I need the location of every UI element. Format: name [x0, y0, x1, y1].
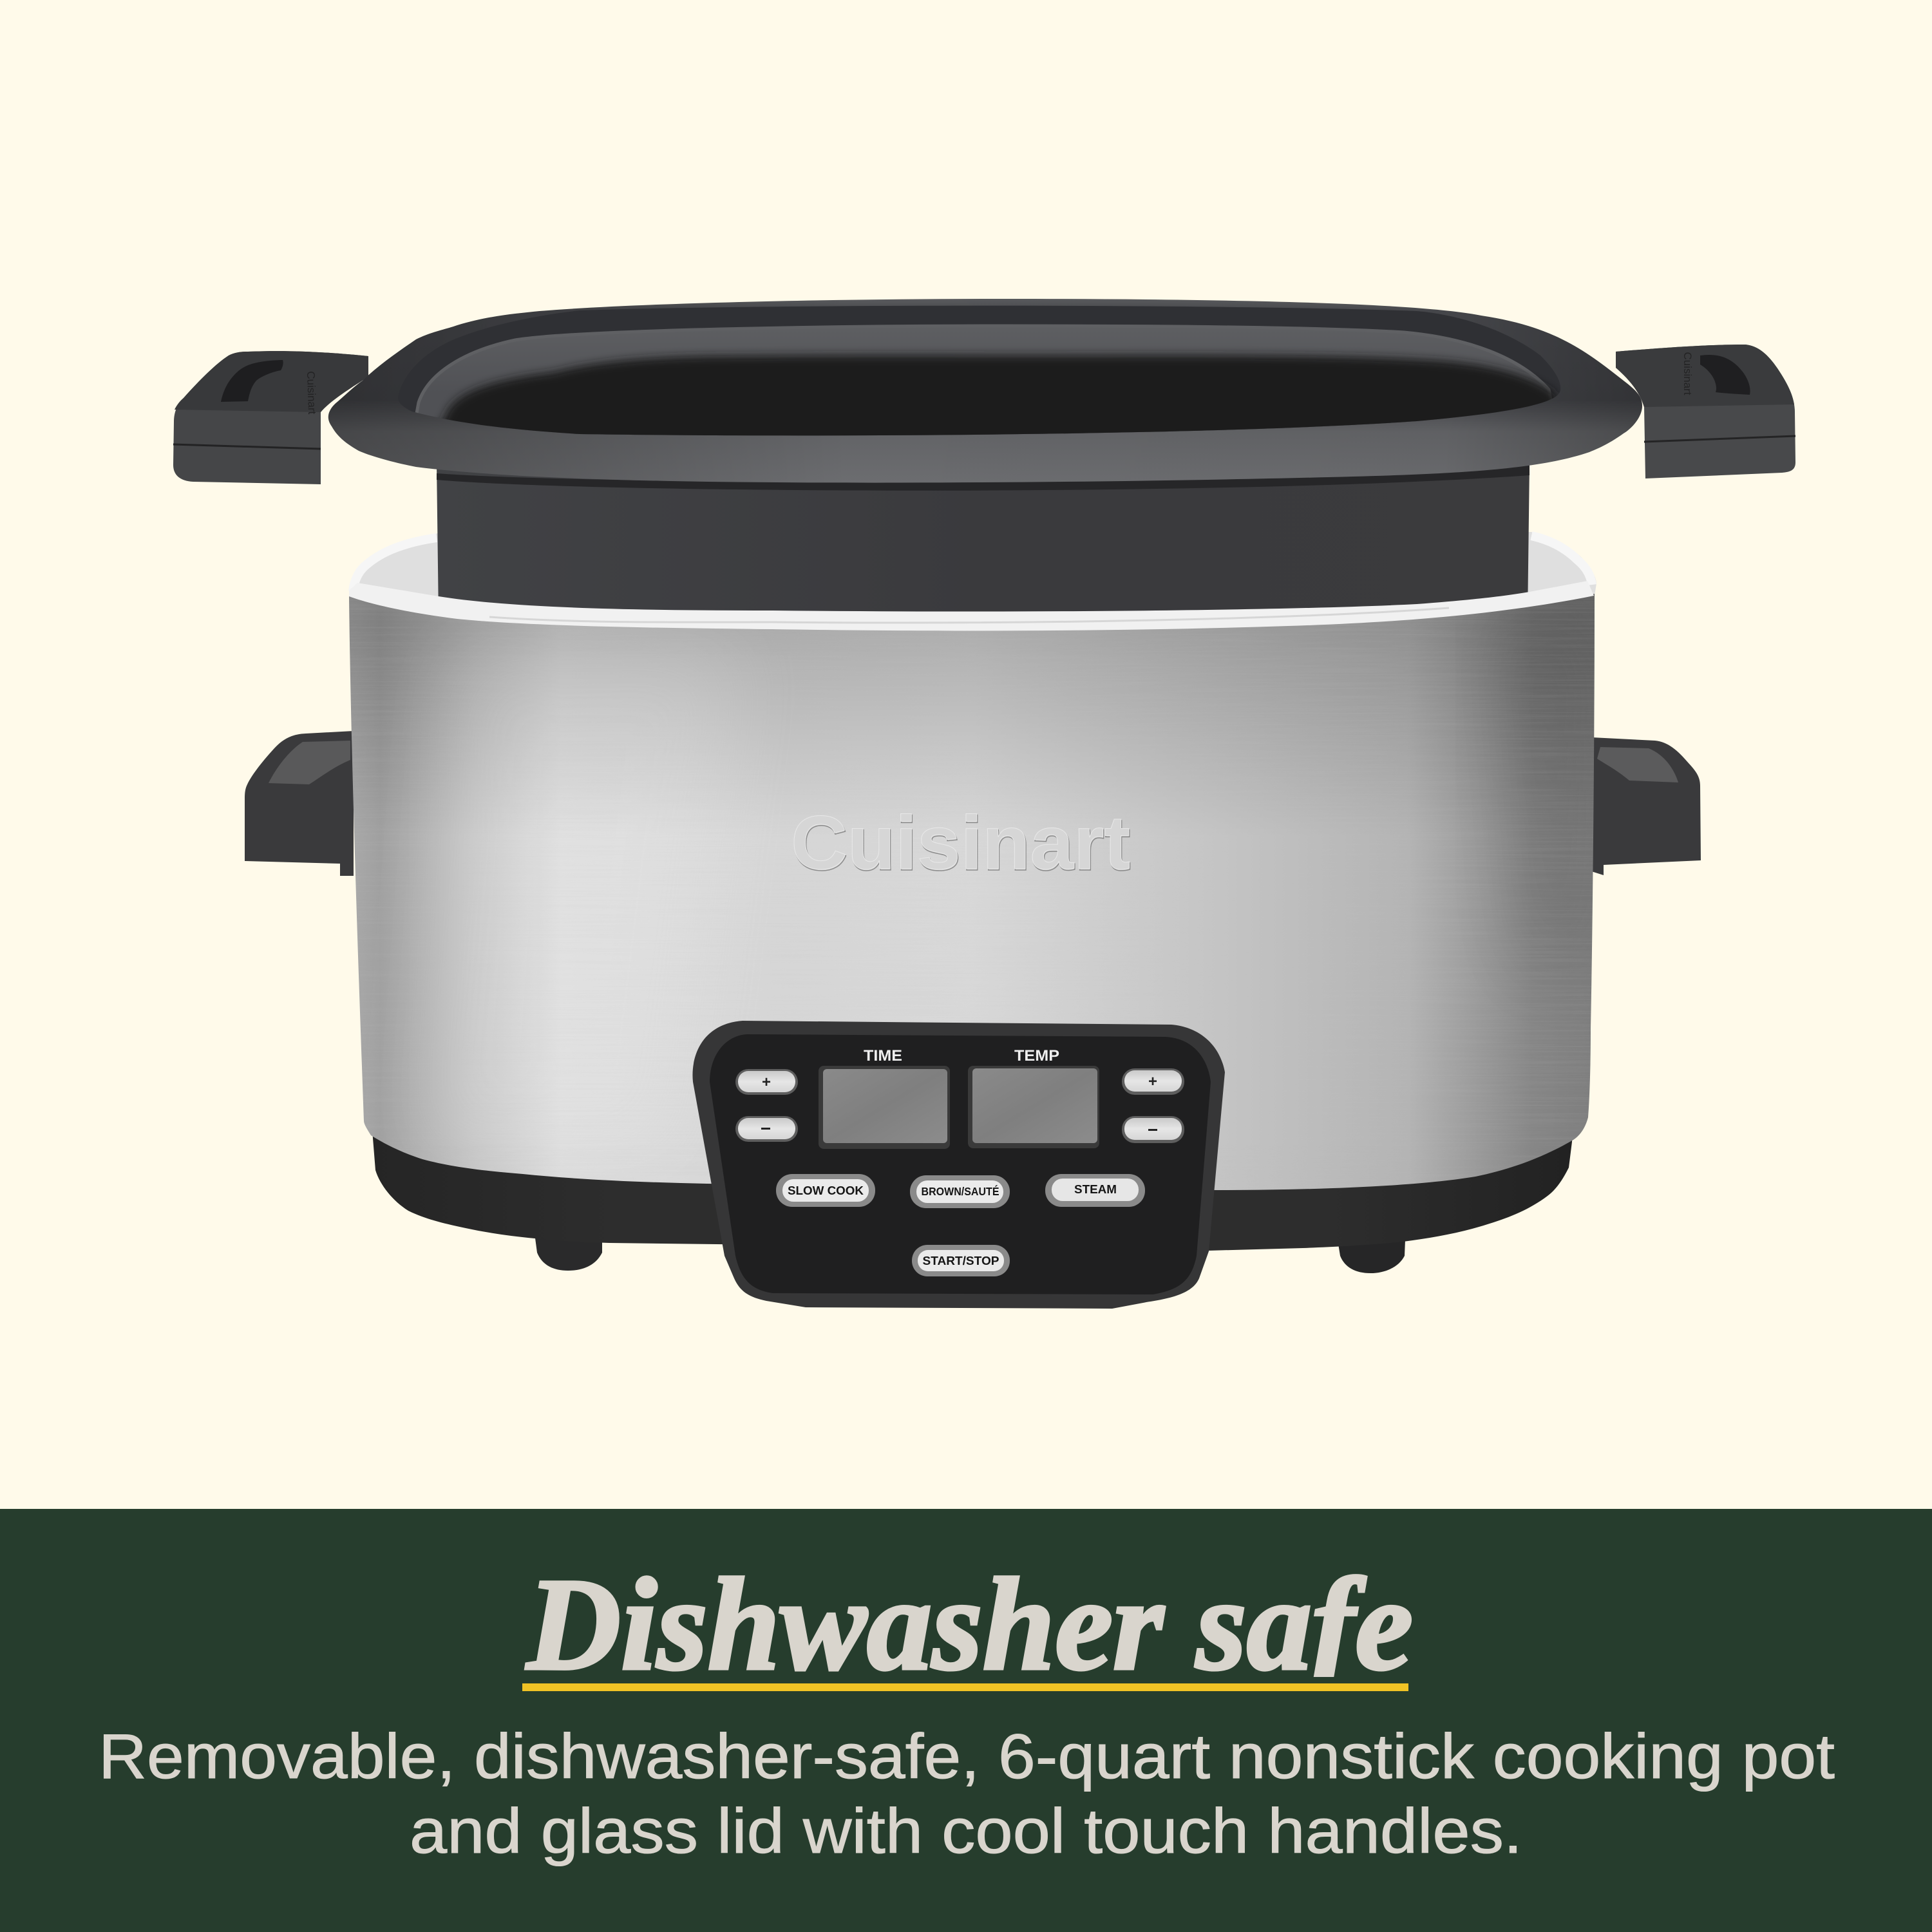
temp display — [968, 1066, 1099, 1148]
left base handle — [245, 731, 354, 876]
slow cook button — [776, 1174, 875, 1207]
pot interior — [404, 305, 1560, 435]
caption band — [0, 1509, 1932, 1932]
left lid handle — [173, 351, 368, 484]
nonstick pot rim — [316, 296, 1649, 486]
brown saute button: BROWN/SAUTÉ — [921, 1184, 999, 1198]
white rim (front) — [349, 581, 1594, 630]
temp plus button — [1122, 1068, 1184, 1095]
TEMP label: TEMP — [1014, 1047, 1059, 1065]
steam button — [1045, 1174, 1145, 1207]
body text line 2: and glass lid with cool touch handles. — [410, 1795, 1522, 1866]
black base — [372, 1130, 1573, 1251]
start stop button — [912, 1245, 1010, 1276]
right lid handle — [1616, 345, 1795, 478]
temp plus button: + — [1148, 1073, 1157, 1090]
brown saute button — [910, 1175, 1010, 1208]
liner lip left — [353, 538, 437, 591]
right base handle — [1589, 737, 1701, 875]
time plus button — [735, 1069, 798, 1095]
heading: Dishwasher safe — [526, 1551, 1413, 1698]
body text line 1: Removable, dishwasher-safe, 6-quart nonstick cooking pot — [99, 1721, 1835, 1792]
TIME label: TIME — [864, 1047, 902, 1065]
right lid handle: Cuisinart — [1681, 352, 1694, 395]
embossed logo: Cuisinart — [791, 802, 1131, 887]
pot rim shadow — [437, 460, 1530, 491]
heading underline — [522, 1683, 1408, 1691]
stainless housing — [341, 586, 1604, 1198]
inner white liner (back) — [349, 532, 1596, 644]
slow cook button: SLOW COOK — [788, 1184, 864, 1197]
liner lip right — [1531, 536, 1592, 585]
start stop button: START/STOP — [922, 1255, 999, 1267]
steam button: STEAM — [1074, 1183, 1117, 1196]
control panel — [692, 1021, 1225, 1309]
left lid handle: Cuisinart — [305, 371, 318, 415]
time minus button — [735, 1116, 798, 1142]
left foot — [535, 1233, 602, 1271]
embossed logo: Cuisinart — [791, 800, 1130, 886]
time plus button: + — [762, 1074, 771, 1091]
removable cooking pot body — [437, 464, 1530, 618]
temp minus button — [1122, 1116, 1184, 1143]
background — [0, 0, 1932, 1509]
time display — [819, 1066, 950, 1149]
product: multicooker — [173, 296, 1795, 1309]
right foot — [1338, 1240, 1405, 1273]
